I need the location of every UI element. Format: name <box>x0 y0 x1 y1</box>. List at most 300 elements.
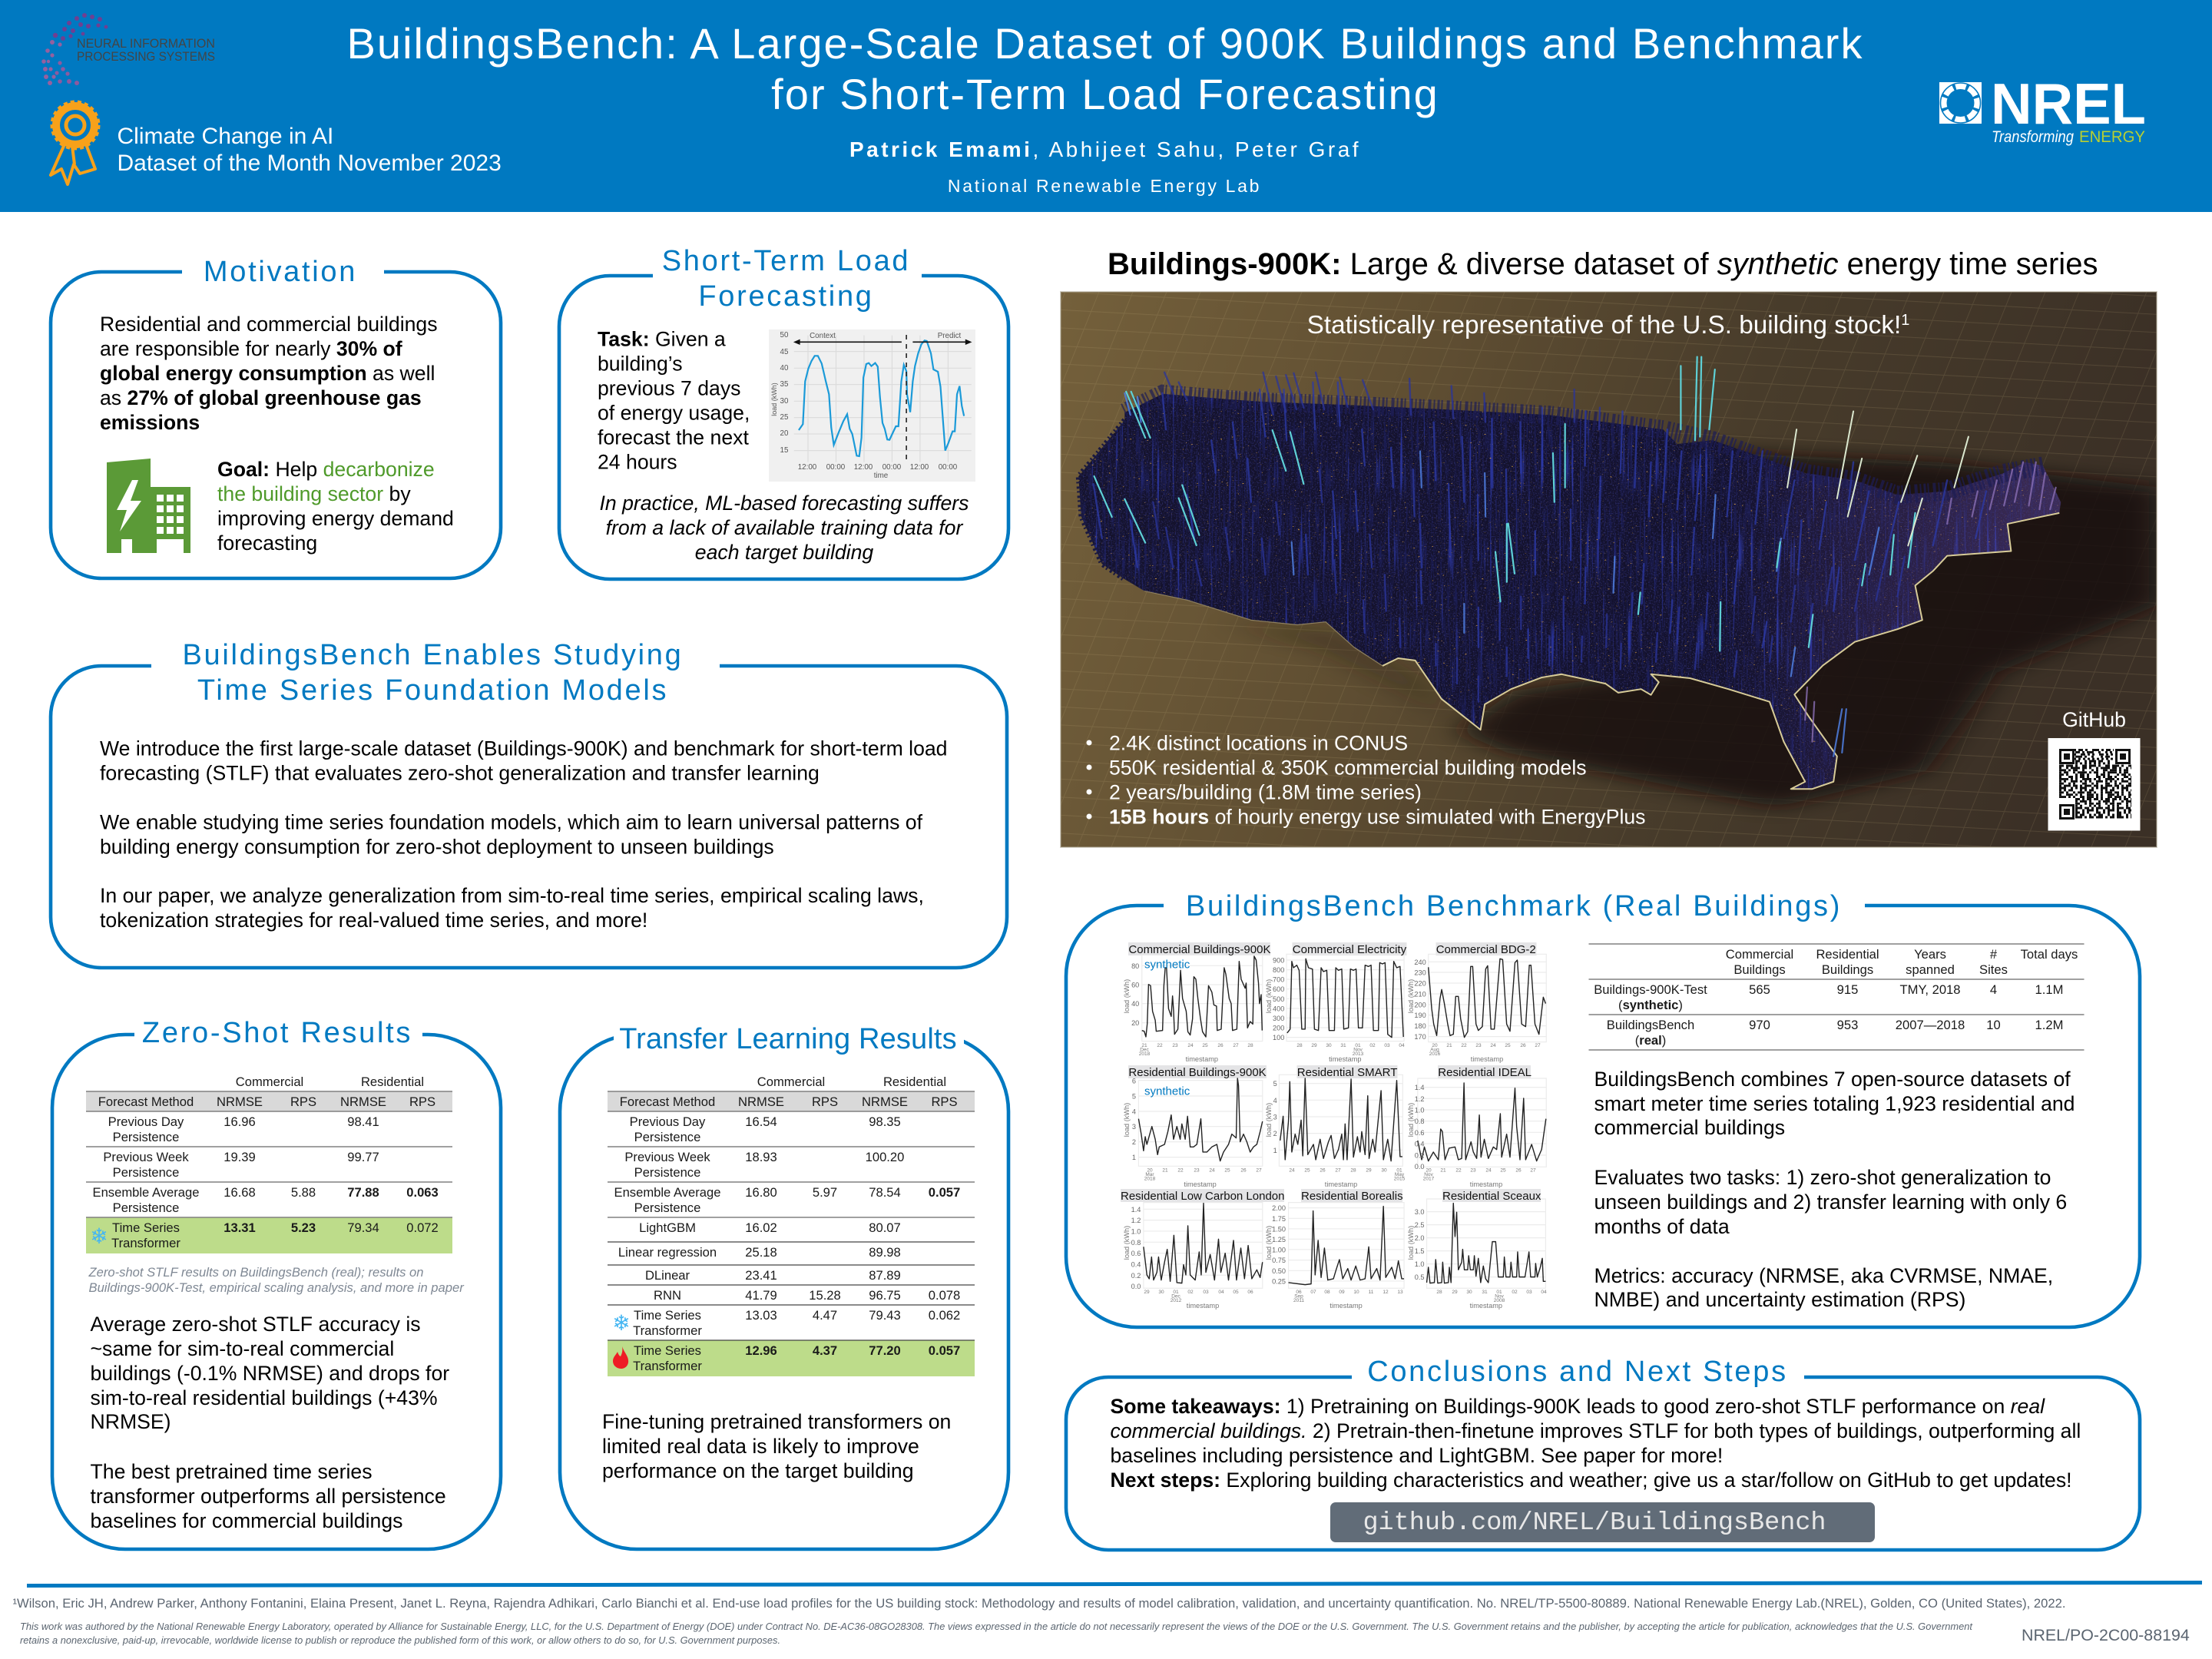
chart: nine load time series: 24 <box>1485 1168 1492 1174</box>
chart: nine load time series: 0.4 <box>1415 1140 1424 1147</box>
chart: nine load time series: 0.0 <box>1131 1283 1141 1290</box>
table: dataset comparison: 1.1M <box>2035 982 2063 997</box>
chart: nine load time series: timestamp <box>1471 1055 1503 1063</box>
chart: nine load time series: 20 <box>1432 1043 1438 1048</box>
text: takeaways: Some takeaways: 1) Pretraining on Buildings-900K leads to good zero-shot STLF performance on real <box>1111 1395 2045 1418</box>
chart: nine load time series: 5 <box>1132 1092 1136 1100</box>
chart: nine load time series: 25 <box>1500 1168 1506 1174</box>
chart: nine load time series: synthetic <box>1144 1085 1190 1098</box>
chart: context and predict load curve: 12:00 <box>798 463 817 472</box>
chart: nine load time series: 1.0 <box>1415 1260 1424 1268</box>
table: transfer learning results: Transformer <box>633 1359 702 1373</box>
table: dataset comparison: Buildings <box>1734 962 1786 977</box>
text: motivation statement <box>100 313 438 434</box>
chart: nine load time series: 27 <box>1535 1043 1541 1048</box>
text: motivation statement: as 27% of global greenhouse gas <box>100 386 422 409</box>
chart: nine load time series: 2011 <box>1293 1298 1304 1303</box>
text: zero-shot findings: NRMSE) <box>91 1410 171 1433</box>
text: transfer findings: Fine-tuning pretrained transformers on <box>602 1410 951 1433</box>
chart: nine load time series: 24 <box>1490 1043 1496 1048</box>
text: legal disclaimer <box>20 1621 1973 1646</box>
table: zero-shot results: Residential <box>361 1075 424 1089</box>
table: transfer learning results: 18.93 <box>745 1150 777 1164</box>
panel: benchmark real buildings <box>1066 890 2140 1327</box>
chart: nine load time series: 2018 <box>1144 1177 1156 1182</box>
chart: nine load time series: 2012 <box>1171 1298 1182 1303</box>
chart: nine load time series: load (kWh) <box>1407 1103 1415 1137</box>
text: takeaways: Next steps: Exploring building characteristics and weather; give us a star/follow on GitHub to get updates! <box>1111 1469 2072 1492</box>
chart: nine load time series: timestamp <box>1186 1055 1218 1063</box>
fuzzy top and west edges <box>1124 394 2043 495</box>
table: zero-shot results <box>86 1075 452 1253</box>
chart: nine load time series: 02 <box>1187 1290 1194 1295</box>
text: goal: improving energy demand <box>217 507 454 530</box>
table: zero-shot results: 77.88 <box>347 1185 379 1200</box>
chart: nine load time series: Mar <box>1145 1172 1154 1177</box>
text: motivation statement: Residential and commercial buildings <box>100 313 438 336</box>
chart: nine load time series: 100 <box>1273 1034 1284 1041</box>
table: transfer learning results: 79.43 <box>869 1308 901 1323</box>
table: zero-shot results: 98.41 <box>347 1114 379 1129</box>
chart: context and predict load curve: 15 <box>780 446 789 455</box>
chart: context and predict load curve: 30 <box>780 397 789 406</box>
chart: context and predict load curve: 00:00 <box>826 463 846 472</box>
icon: snowflake: ❄ <box>90 1224 108 1249</box>
chart: nine load time series: 01 <box>1496 1290 1502 1295</box>
list: dataset facts <box>1086 731 1645 828</box>
table: zero-shot results: RPS <box>409 1094 435 1109</box>
table: transfer learning results: Transformer <box>633 1323 702 1338</box>
chart: nine load time series: Commercial Buildings-900K <box>1128 943 1270 956</box>
chart: nine load time series: 230 <box>1414 969 1426 977</box>
chart: context and predict load curve: 12:00 <box>910 463 929 472</box>
logo: NeurIPS: PROCESSING SYSTEMS <box>77 50 215 64</box>
chart: nine load time series: load (kWh) <box>1123 1103 1131 1137</box>
panel: conclusions and next steps <box>1066 1356 2140 1550</box>
chart: nine load time series: 22 <box>1177 1168 1184 1174</box>
table: transfer learning results: Commercial <box>757 1075 825 1089</box>
chart: nine load time series: 26 <box>1217 1043 1224 1048</box>
table: transfer learning results: 5.97 <box>813 1185 837 1200</box>
table: zero-shot results: Previous Week <box>103 1150 189 1164</box>
table: dataset comparison: # <box>1990 947 1998 962</box>
table: transfer learning results: 0.078 <box>929 1288 960 1303</box>
chart: nine load time series: 01 <box>1173 1290 1179 1295</box>
chart: nine load time series: 01 <box>1355 1043 1361 1048</box>
chart: nine load time series <box>1121 942 1547 1310</box>
chart: nine load time series: 01 <box>1396 1168 1402 1174</box>
table: zero-shot results: RPS <box>290 1094 316 1109</box>
text: foundation paragraphs <box>100 737 948 932</box>
chart: nine load time series: 04 <box>1218 1290 1224 1295</box>
text: goal: forecasting <box>217 531 317 555</box>
chart: nine load time series: 220 <box>1414 980 1426 988</box>
heading: conclusions: Conclusions and Next Steps <box>1367 1356 1788 1388</box>
chart: nine load time series: 23 <box>1172 1043 1178 1048</box>
affiliation: National Renewable Energy Lab <box>948 176 1261 196</box>
chart: nine load time series: timestamp <box>1470 1181 1502 1188</box>
chart: nine load time series: 1.75 <box>1272 1215 1286 1223</box>
table: zero-shot results: 99.77 <box>347 1150 379 1164</box>
panel: zero-shot results <box>52 1017 501 1549</box>
chart: nine load time series: 24 <box>1209 1168 1215 1174</box>
chart: nine load time series: 0.25 <box>1272 1278 1286 1286</box>
list: dataset facts: 15B hours of hourly energy use simulated with EnergyPlus <box>1109 805 1645 828</box>
chart: nine load time series: 21 <box>1446 1043 1452 1048</box>
table: transfer learning results: 0.057 <box>929 1343 960 1358</box>
chart: context and predict load curve: 40 <box>780 364 789 373</box>
table: transfer learning results: NRMSE <box>862 1094 908 1109</box>
chart: nine load time series: 2017 <box>1423 1177 1435 1182</box>
button: GitHub link <box>1330 1502 1875 1542</box>
chart: nine load time series: 04 <box>1399 1043 1405 1048</box>
icon: flame <box>613 1346 628 1369</box>
logo: NREL: ENERGY <box>2079 128 2145 146</box>
table: transfer learning results: RPS <box>931 1094 958 1109</box>
text: foundation paragraphs: tokenization strategies for real-valued time series, and more! <box>100 909 647 932</box>
text: legal disclaimer: retains a nonexclusive, paid-up, irrevocable, worldwide license to publish or reproduce the published form of this work, or allow others to do so, for U.S. Government purposes. <box>20 1635 780 1646</box>
heading: short-term load forecasting: Short-Term Load <box>662 245 910 277</box>
table: zero-shot results: 16.68 <box>224 1185 256 1200</box>
table: transfer learning results: 15.28 <box>809 1288 841 1303</box>
chart: context and predict load curve: 00:00 <box>939 463 958 472</box>
table: transfer learning results: Time Series <box>634 1343 701 1358</box>
chart: nine load time series: timestamp <box>1184 1181 1217 1188</box>
chart: nine load time series: 27 <box>1335 1168 1341 1174</box>
chart: nine load time series: 200 <box>1414 1002 1426 1009</box>
text: goal <box>217 458 454 555</box>
caption: zero-shot note: Buildings-900K-Test, empirical scaling analysis, and more in paper <box>89 1280 465 1295</box>
table: transfer learning results: Forecast Method <box>620 1094 715 1109</box>
chart: nine load time series: 26 <box>1520 1043 1526 1048</box>
heading: motivation: Motivation <box>204 256 357 288</box>
table: transfer learning results: 4.47 <box>813 1308 837 1323</box>
chart: nine load time series: timestamp <box>1187 1302 1219 1310</box>
chart: nine load time series: load (kWh) <box>1265 979 1273 1013</box>
chart: nine load time series: 26 <box>1240 1168 1247 1174</box>
chart: nine load time series: 300 <box>1273 1015 1284 1022</box>
chart: nine load time series: 4 <box>1132 1108 1136 1115</box>
chart: nine load time series: 2 <box>1132 1138 1136 1146</box>
chart: context and predict load curve: 45 <box>780 348 789 356</box>
table: zero-shot results: 16.96 <box>224 1114 256 1129</box>
header band <box>0 0 2212 212</box>
title: for Short-Term Load Forecasting <box>771 70 1439 118</box>
chart: nine load time series: 12 <box>1382 1290 1389 1295</box>
table: dataset comparison: 1.2M <box>2035 1018 2063 1032</box>
table: zero-shot results: Persistence <box>113 1165 179 1180</box>
heading: zero-shot results: Zero-Shot Results <box>142 1017 412 1049</box>
chart: context and predict load curve: load (kWh) <box>770 382 778 416</box>
table: dataset comparison: Commercial <box>1726 947 1793 962</box>
authors: Patrick Emami, Abhijeet Sahu, Peter Graf <box>849 137 1361 161</box>
text: foundation paragraphs: We enable studying time series foundation models, which aim to learn universal patterns of <box>100 811 923 834</box>
chart: nine load time series: 1.0 <box>1131 1227 1141 1235</box>
chart: nine load time series: Residential Sceaux <box>1442 1190 1541 1203</box>
text: task: forecast the next <box>598 426 749 449</box>
chart: nine load time series: 2 <box>1273 1130 1277 1137</box>
chart: context and predict load curve: 35 <box>780 380 789 389</box>
table: transfer learning results: 89.98 <box>869 1245 901 1260</box>
text: representative claim: 1 <box>1901 312 1909 329</box>
text: task: of energy usage, <box>598 401 750 424</box>
chart: context and predict load curve <box>769 329 975 482</box>
chart: nine load time series: 0.8 <box>1131 1239 1141 1247</box>
logo: NeurIPS <box>41 13 215 85</box>
text: benchmark description <box>1594 1068 2075 1311</box>
chart: nine load time series: 06 <box>1296 1290 1302 1295</box>
icon: snowflake: ❄ <box>612 1310 631 1336</box>
chart: nine load time series: 2016 <box>1429 1051 1441 1057</box>
chart: nine load time series: Nov <box>1353 1048 1363 1052</box>
chart: nine load time series: 29 <box>1366 1168 1372 1174</box>
chart: nine load time series: 31 <box>1482 1290 1488 1295</box>
text: zero-shot findings: ~same for sim-to-real commercial <box>91 1337 394 1360</box>
logo: NREL: NREL <box>1991 71 2146 136</box>
table: dataset comparison: Buildings-900K-Test <box>1594 982 1707 997</box>
text: foundation paragraphs: We introduce the first large-scale dataset (Buildings-900K) and benchmark for short-term load <box>100 737 948 760</box>
chart: nine load time series: Nov <box>1495 1294 1505 1300</box>
chart: nine load time series: 20 <box>1131 1019 1139 1027</box>
chart: nine load time series: 26 <box>1320 1168 1326 1174</box>
text: goal: Goal: Help decarbonize <box>217 458 435 481</box>
caption: zero-shot note: Zero-shot STLF results on BuildingsBench (real); results on <box>88 1265 423 1280</box>
chart: nine load time series: timestamp <box>1470 1302 1502 1310</box>
table: transfer learning results: Residential <box>883 1075 946 1089</box>
chart: nine load time series: 24 <box>1187 1043 1194 1048</box>
chart: nine load time series: 0.8 <box>1415 1118 1424 1125</box>
panel: short-term load forecasting <box>559 245 1008 579</box>
chart: context and predict load curve: Predict <box>938 332 962 340</box>
table: transfer learning results: 0.062 <box>929 1308 960 1323</box>
chart: nine load time series: 3 <box>1132 1123 1136 1131</box>
text: benchmark description: Evaluates two tasks: 1) zero-shot generalization to <box>1594 1166 2051 1189</box>
chart: nine load time series: Residential Borealis <box>1301 1190 1403 1203</box>
chart: nine load time series: load (kWh) <box>1407 1226 1415 1260</box>
chart: nine load time series: 03 <box>1203 1290 1209 1295</box>
table: zero-shot results: Transformer <box>111 1236 180 1250</box>
table: zero-shot results: NRMSE <box>340 1094 386 1109</box>
table: transfer learning results: RPS <box>812 1094 838 1109</box>
logo: NREL: Transforming <box>1992 128 2074 146</box>
chart: nine load time series: 24 <box>1289 1168 1295 1174</box>
chart: nine load time series: 600 <box>1273 985 1284 993</box>
table: dataset comparison: 2007—2018 <box>1896 1018 1965 1032</box>
chart: nine load time series: 1 <box>1273 1147 1277 1154</box>
chart: nine load time series: 20 <box>1426 1168 1432 1174</box>
chart: nine load time series: 30 <box>1466 1290 1472 1295</box>
text: task: building’s <box>598 352 683 375</box>
table: dataset comparison <box>1588 944 2085 1050</box>
chart: nine load time series: 240 <box>1414 959 1426 966</box>
chart: nine load time series: Dec <box>1171 1294 1181 1300</box>
text: takeaways: baselines including persistence and LightGBM. See paper for more! <box>1111 1444 1723 1467</box>
table: dataset comparison: Residential <box>1816 947 1879 962</box>
text: benchmark description: smart meter time series totaling 1,923 residential and <box>1594 1092 2075 1115</box>
chart: nine load time series: 0.6 <box>1131 1250 1141 1257</box>
text: zero-shot findings: transformer outperforms all persistence <box>91 1485 446 1508</box>
text: benchmark description: Metrics: accuracy (NRMSE, aka CVRMSE, NMAE, <box>1594 1264 2053 1287</box>
chart: nine load time series: 25 <box>1224 1168 1230 1174</box>
heading: short-term load forecasting <box>662 245 910 313</box>
table: dataset comparison: 4 <box>1990 982 1997 997</box>
text: motivation statement: global energy consumption as well <box>100 362 435 385</box>
table: zero-shot results: Commercial <box>236 1075 303 1089</box>
chart: nine load time series: 25 <box>1304 1168 1310 1174</box>
chart: nine load time series: 200 <box>1273 1025 1284 1032</box>
chart: nine load time series: 11 <box>1369 1290 1374 1295</box>
text: benchmark description: BuildingsBench combines 7 open-source datasets of <box>1594 1068 2071 1091</box>
chart: nine load time series: 3 <box>1273 1114 1277 1121</box>
label: GitHub: GitHub <box>2062 708 2126 731</box>
spikes white <box>1787 411 1969 545</box>
table: transfer learning results: 98.35 <box>869 1114 901 1129</box>
chart: nine load time series: 1.4 <box>1415 1084 1424 1091</box>
chart: nine load time series: 2008 <box>1494 1298 1505 1303</box>
chart: nine load time series: Sep <box>1294 1294 1303 1300</box>
logo: NeurIPS: NEURAL INFORMATION <box>77 37 215 51</box>
chart: nine load time series: 400 <box>1273 1005 1284 1012</box>
chart: nine load time series: 1.0 <box>1415 1106 1424 1114</box>
table: dataset comparison: Years <box>1914 947 1946 962</box>
chart: nine load time series: 21 <box>1162 1168 1168 1174</box>
chart: nine load time series: 0.2 <box>1131 1272 1141 1280</box>
table: dataset comparison: 953 <box>1837 1018 1858 1032</box>
chart: nine load time series: 60 <box>1131 982 1139 989</box>
chart: nine load time series: 08 <box>1324 1290 1330 1295</box>
table: transfer learning results: Previous Week <box>624 1150 710 1164</box>
chart: nine load time series: 30 <box>1158 1290 1164 1295</box>
table: dataset comparison: 970 <box>1749 1018 1770 1032</box>
heading: benchmark: BuildingsBench Benchmark (Real Buildings) <box>1186 890 1842 922</box>
table: transfer learning results: Persistence <box>634 1165 700 1180</box>
button: GitHub link: github.com/NREL/BuildingsBench <box>1363 1508 1826 1538</box>
chart: nine load time series: 5 <box>1273 1080 1277 1088</box>
chart: nine load time series: 0.4 <box>1131 1261 1141 1269</box>
label: report number: NREL/PO-2C00-88194 <box>2022 1626 2190 1644</box>
chart: nine load time series: 0.0 <box>1415 1163 1424 1171</box>
table: dataset comparison: spanned <box>1906 962 1955 977</box>
chart: nine load time series: 1.50 <box>1272 1226 1286 1233</box>
chart: nine load time series: 23 <box>1475 1043 1482 1048</box>
chart: nine load time series: 29 <box>1144 1290 1150 1295</box>
table: zero-shot results: NRMSE <box>217 1094 263 1109</box>
list: dataset facts: 550K residential & 350K commercial building models <box>1109 756 1587 779</box>
text: benchmark description: NMBE) and uncertainty estimation (RPS) <box>1594 1288 1965 1311</box>
chart: nine load time series: 29 <box>1452 1290 1458 1295</box>
panel: US building stock map image <box>1061 292 2161 847</box>
table: transfer learning results: 16.80 <box>745 1185 777 1200</box>
chart: nine load time series: 03 <box>1384 1043 1390 1048</box>
table: dataset comparison: 565 <box>1749 982 1770 997</box>
chart: nine load time series: 30 <box>1326 1043 1332 1048</box>
chart: nine load time series: 2.00 <box>1272 1204 1286 1212</box>
chart: nine load time series: 25 <box>1505 1043 1511 1048</box>
chart: context and predict load curve: 50 <box>780 331 789 339</box>
chart: nine load time series: Residential SMART <box>1297 1066 1397 1079</box>
chart: nine load time series: 28 <box>1247 1043 1253 1048</box>
coast <box>1144 591 1382 666</box>
chart: nine load time series: 05 <box>1233 1290 1239 1295</box>
chart: nine load time series: 26 <box>1515 1168 1522 1174</box>
table: transfer learning results: 41.79 <box>745 1288 777 1303</box>
text: zero-shot findings: buildings (-0.1% NRMSE) and drops for <box>91 1362 449 1385</box>
spikes cyan <box>1094 357 1916 651</box>
chart: nine load time series: load (kWh) <box>1123 1226 1131 1260</box>
chart: nine load time series: 10 <box>1353 1290 1359 1295</box>
text: foundation paragraphs: In our paper, we analyze generalization from sim-to-real time series, empirical scaling laws, <box>100 884 924 907</box>
chart: nine load time series: 6 <box>1132 1077 1136 1084</box>
chart: nine load time series: 40 <box>1131 1000 1139 1008</box>
text: transfer findings: performance on the target building <box>602 1459 914 1482</box>
chart: nine load time series: 0.75 <box>1272 1257 1286 1264</box>
chart: nine load time series: 25 <box>1202 1043 1208 1048</box>
table: zero-shot results: Persistence <box>113 1130 179 1144</box>
chart: nine load time series: 02 <box>1512 1290 1518 1295</box>
panel: motivation <box>51 256 501 578</box>
table: transfer learning results: 100.20 <box>866 1150 904 1164</box>
chart: nine load time series: 21 <box>1440 1168 1446 1174</box>
table: transfer learning results: 12.96 <box>745 1343 777 1358</box>
chart: nine load time series: May <box>1395 1172 1405 1177</box>
chart: nine load time series: 20 <box>1147 1168 1153 1174</box>
chart: nine load time series: Residential Buildings-900K <box>1128 1066 1267 1079</box>
chart: nine load time series: 21 <box>1141 1043 1147 1048</box>
chart: context and predict load curve: 25 <box>780 413 789 422</box>
table: dataset comparison: 10 <box>1986 1018 2001 1032</box>
table: transfer learning results: 4.37 <box>813 1343 837 1358</box>
table: dataset comparison: Total days <box>2021 947 2078 962</box>
table: zero-shot results: 0.063 <box>406 1185 439 1200</box>
table: dataset comparison: (real) <box>1635 1033 1666 1048</box>
chart: nine load time series: 28 <box>1436 1290 1442 1295</box>
chart: nine load time series: 09 <box>1339 1290 1345 1295</box>
table: transfer learning results: LightGBM <box>639 1220 696 1235</box>
table: dataset comparison: (synthetic) <box>1618 998 1683 1012</box>
table: zero-shot results: 5.23 <box>291 1220 316 1235</box>
chart: nine load time series: 210 <box>1414 991 1426 998</box>
text: zero-shot findings: Average zero-shot STLF accuracy is <box>91 1313 421 1336</box>
chart: nine load time series: 1.00 <box>1272 1246 1286 1253</box>
table: dataset comparison: Buildings <box>1822 962 1873 977</box>
text: task <box>598 327 750 473</box>
chart: nine load time series: 28 <box>1296 1043 1303 1048</box>
table: zero-shot results: Time Series <box>112 1220 180 1235</box>
heading: foundation models: Time Series Foundation Models <box>197 674 668 707</box>
chart: nine load time series: 23 <box>1194 1168 1200 1174</box>
text: foundation paragraphs: forecasting (STLF) that evaluates zero-shot generalization and transfer learning <box>100 762 820 785</box>
caption: zero-shot note <box>88 1265 465 1295</box>
chart: nine load time series: 1.2 <box>1131 1217 1141 1224</box>
text: zero-shot findings <box>91 1313 449 1532</box>
text: benchmark description: commercial buildings <box>1594 1116 1785 1139</box>
table: dataset comparison: TMY, 2018 <box>1899 982 1961 997</box>
text: transfer findings: limited real data is likely to improve <box>602 1435 919 1458</box>
table: transfer learning results: 96.75 <box>869 1288 901 1303</box>
chart: nine load time series: 04 <box>1541 1290 1547 1295</box>
table: transfer learning results: NRMSE <box>738 1094 784 1109</box>
chart: nine load time series: 4 <box>1273 1097 1277 1104</box>
chart: nine load time series: 27 <box>1530 1168 1536 1174</box>
table: zero-shot results: 79.34 <box>347 1220 379 1235</box>
text: transfer findings <box>602 1410 951 1482</box>
footer rule <box>27 1582 2202 1585</box>
table: dataset comparison: BuildingsBench <box>1607 1018 1694 1032</box>
table: transfer learning results: 78.54 <box>869 1185 901 1200</box>
chart: nine load time series: 22 <box>1157 1043 1163 1048</box>
chart: nine load time series: 900 <box>1273 957 1284 965</box>
table: transfer learning results: Ensemble Average <box>614 1185 720 1200</box>
